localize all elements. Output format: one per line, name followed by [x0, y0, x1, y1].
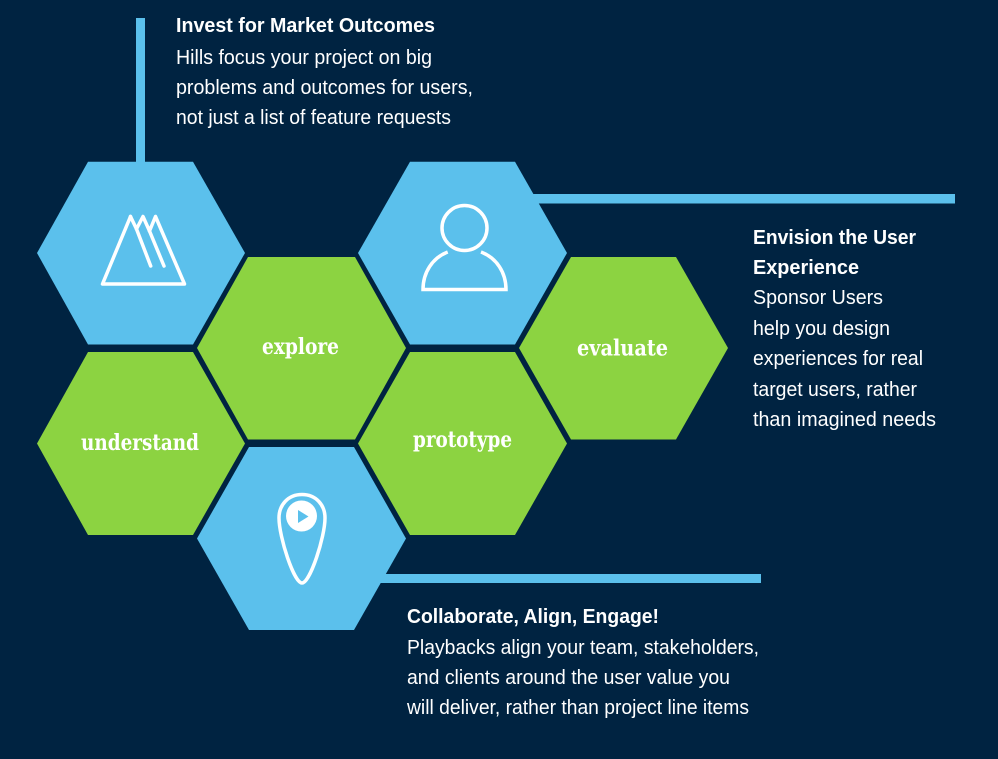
text block: envision the user experience: Sponsor Users: [753, 287, 883, 309]
text block: invest for market outcomes: not just a list of feature requests: [176, 107, 451, 129]
hexagon: evaluate: [519, 257, 728, 440]
hexagon: sponsor users: [358, 162, 567, 344]
hexagon: explore: explore: [262, 334, 339, 360]
text block: collaborate, align, engage: and clients around the user value you: [407, 667, 730, 689]
text block: invest for market outcomes: [176, 15, 473, 129]
hexagon: prototype: [358, 352, 567, 535]
hexagon: playbacks: [197, 447, 406, 630]
text block: collaborate, align, engage: Collaborate, Align, Engage!: [407, 606, 659, 628]
icon: map pin with play button: [279, 494, 325, 583]
hexagon: explore: [197, 257, 406, 440]
text block: collaborate, align, engage: Playbacks align your team, stakeholders,: [407, 637, 759, 659]
text block: envision the user experience: help you design: [753, 318, 890, 340]
connector: hills line: [136, 18, 145, 164]
text block: invest for market outcomes: problems and outcomes for users,: [176, 77, 473, 99]
hexagon: hills: [37, 162, 245, 344]
text block: envision the user experience: Experience: [753, 257, 859, 279]
text block: invest for market outcomes: Invest for Market Outcomes: [176, 15, 435, 37]
text block: envision the user experience: Envision the User: [753, 227, 916, 249]
text block: envision the user experience: target users, rather: [753, 379, 917, 401]
connector: playbacks line: [370, 574, 761, 583]
hexagon: understand: understand: [81, 430, 199, 456]
text block: envision the user experience: [753, 227, 936, 431]
text block: collaborate, align, engage: will deliver, rather than project line items: [406, 697, 749, 719]
hexagon: understand: [37, 352, 245, 535]
icon: person: [423, 206, 506, 290]
hexagon: evaluate: evaluate: [577, 336, 668, 362]
icon: mountains: [102, 216, 184, 284]
text block: collaborate, align, engage: [406, 606, 759, 719]
connector: sponsor users line: [530, 194, 955, 204]
text block: invest for market outcomes: Hills focus your project on big: [176, 47, 432, 69]
text block: envision the user experience: than imagined needs: [753, 409, 936, 431]
text block: envision the user experience: experiences for real: [753, 348, 923, 370]
hexagon: prototype: prototype: [413, 427, 512, 453]
